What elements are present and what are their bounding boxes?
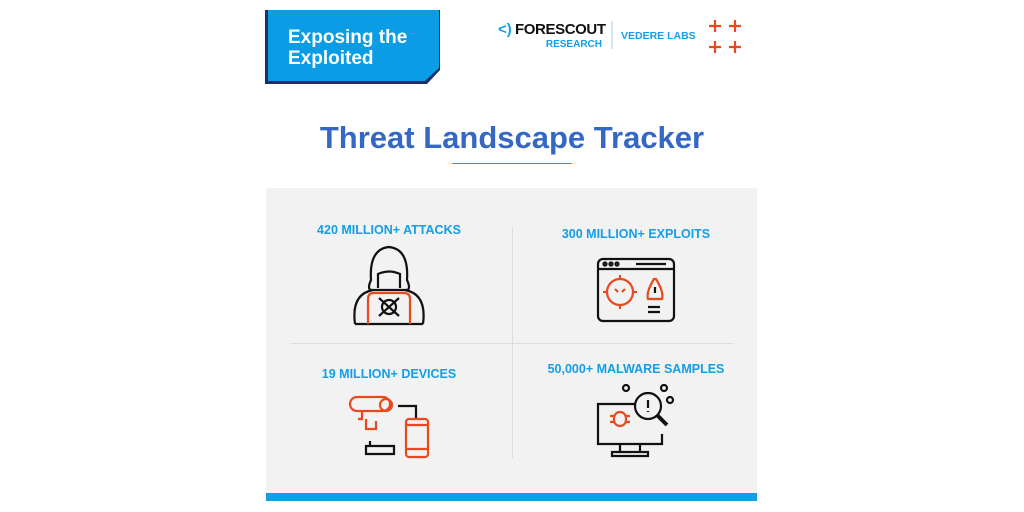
- icon: browser exploit: [596, 258, 676, 322]
- icon: malware monitor: [596, 384, 674, 458]
- logo: VEDERE LABS: [621, 30, 696, 42]
- stat: devices: 19 MILLION+ DEVICES: [322, 367, 456, 381]
- stat: attacks: 420 MILLION+ ATTACKS: [317, 223, 461, 237]
- logo: RESEARCH: [546, 39, 602, 50]
- logo: FORESCOUT: [515, 21, 606, 38]
- header badge: [265, 10, 440, 84]
- stat: exploits: 300 MILLION+ EXPLOITS: [562, 227, 710, 241]
- header badge: Exploited: [288, 48, 374, 69]
- header badge: Exposing the: [288, 27, 407, 48]
- stat: malware: 50,000+ MALWARE SAMPLES: [548, 362, 724, 376]
- logo: [498, 20, 741, 53]
- panel: stats: [266, 188, 757, 501]
- logo: <): [498, 21, 512, 38]
- icon: hacker: [353, 246, 425, 326]
- title: Threat Landscape Tracker: [320, 120, 704, 155]
- icon: devices: [348, 396, 430, 458]
